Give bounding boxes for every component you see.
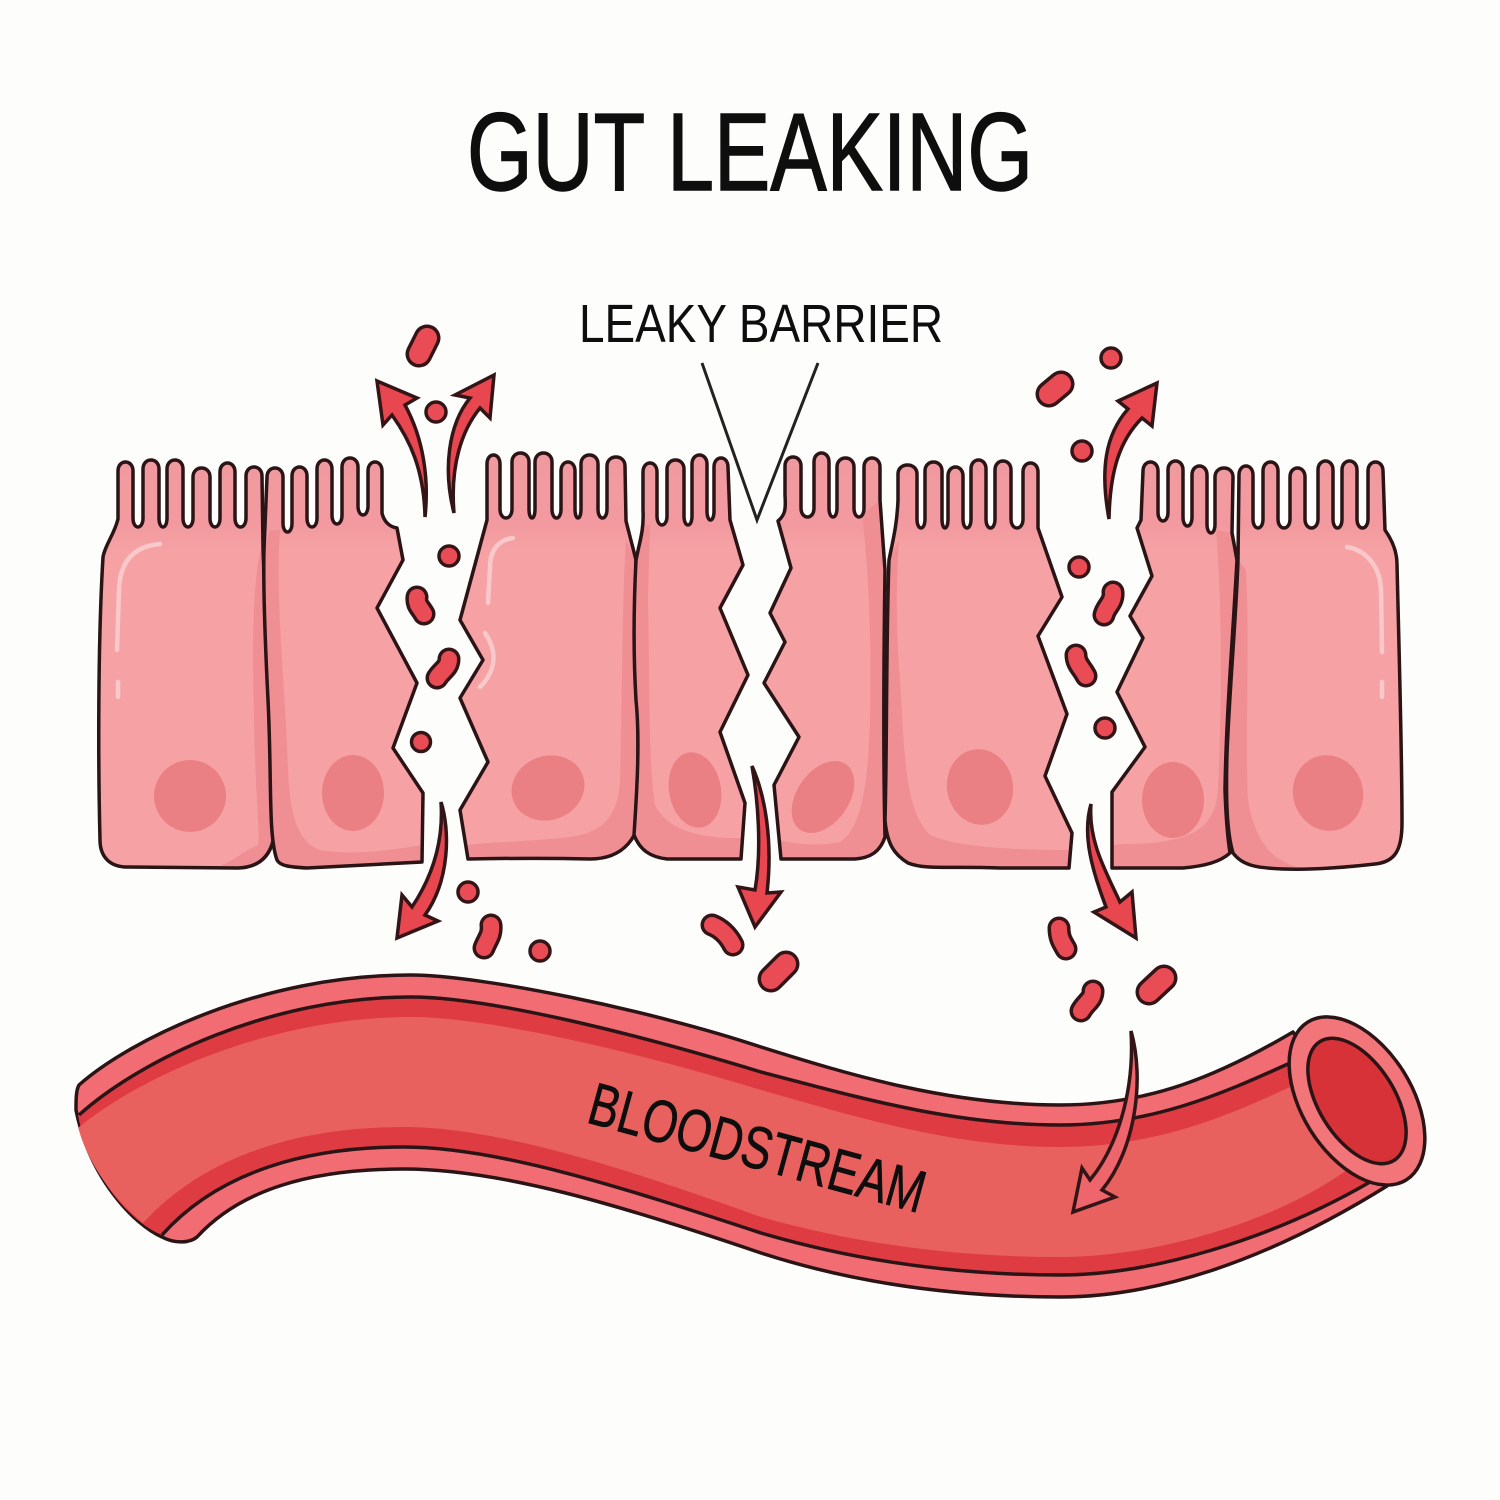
vessel lumen (78, 1017, 1347, 1257)
arrow: down, gap 2 (738, 766, 781, 927)
round particles (412, 348, 1121, 961)
gut epithelial cell layer (99, 453, 1402, 869)
vessel inner band (78, 997, 1370, 1275)
title: GUT LEAKING (467, 91, 1033, 214)
vessel wall lines (79, 997, 1370, 1275)
vessel opening (1261, 993, 1453, 1209)
cell 4 (634, 455, 748, 859)
arrow: up left, gap 1 (377, 381, 426, 517)
cell 8 (1227, 461, 1402, 869)
arrow: down left, gap 1 (397, 802, 446, 938)
arrow: up right, gap 1 (448, 375, 494, 513)
cell 3 (460, 453, 640, 859)
cell 7 (1112, 461, 1237, 868)
cell 6 (885, 460, 1072, 868)
cell 1 (99, 460, 275, 868)
cell 5 (764, 453, 885, 859)
label: bloodstream: BLOODSTREAM (582, 1070, 933, 1226)
blood vessel (76, 975, 1453, 1297)
bacteria and particles (412, 338, 1164, 1011)
arrow: up right, gap 3 (1105, 383, 1157, 519)
capsule bacteria (419, 338, 1164, 992)
cell 2 (264, 458, 423, 868)
arrow: into bloodstream (1073, 1031, 1137, 1212)
arrow: down right, gap 3 (1088, 804, 1136, 938)
bean bacteria (417, 592, 1113, 1011)
vessel outer wall (76, 975, 1387, 1297)
label: leaky barrier (579, 294, 943, 520)
label: leaky barrier: LEAKY BARRIER (579, 294, 943, 354)
